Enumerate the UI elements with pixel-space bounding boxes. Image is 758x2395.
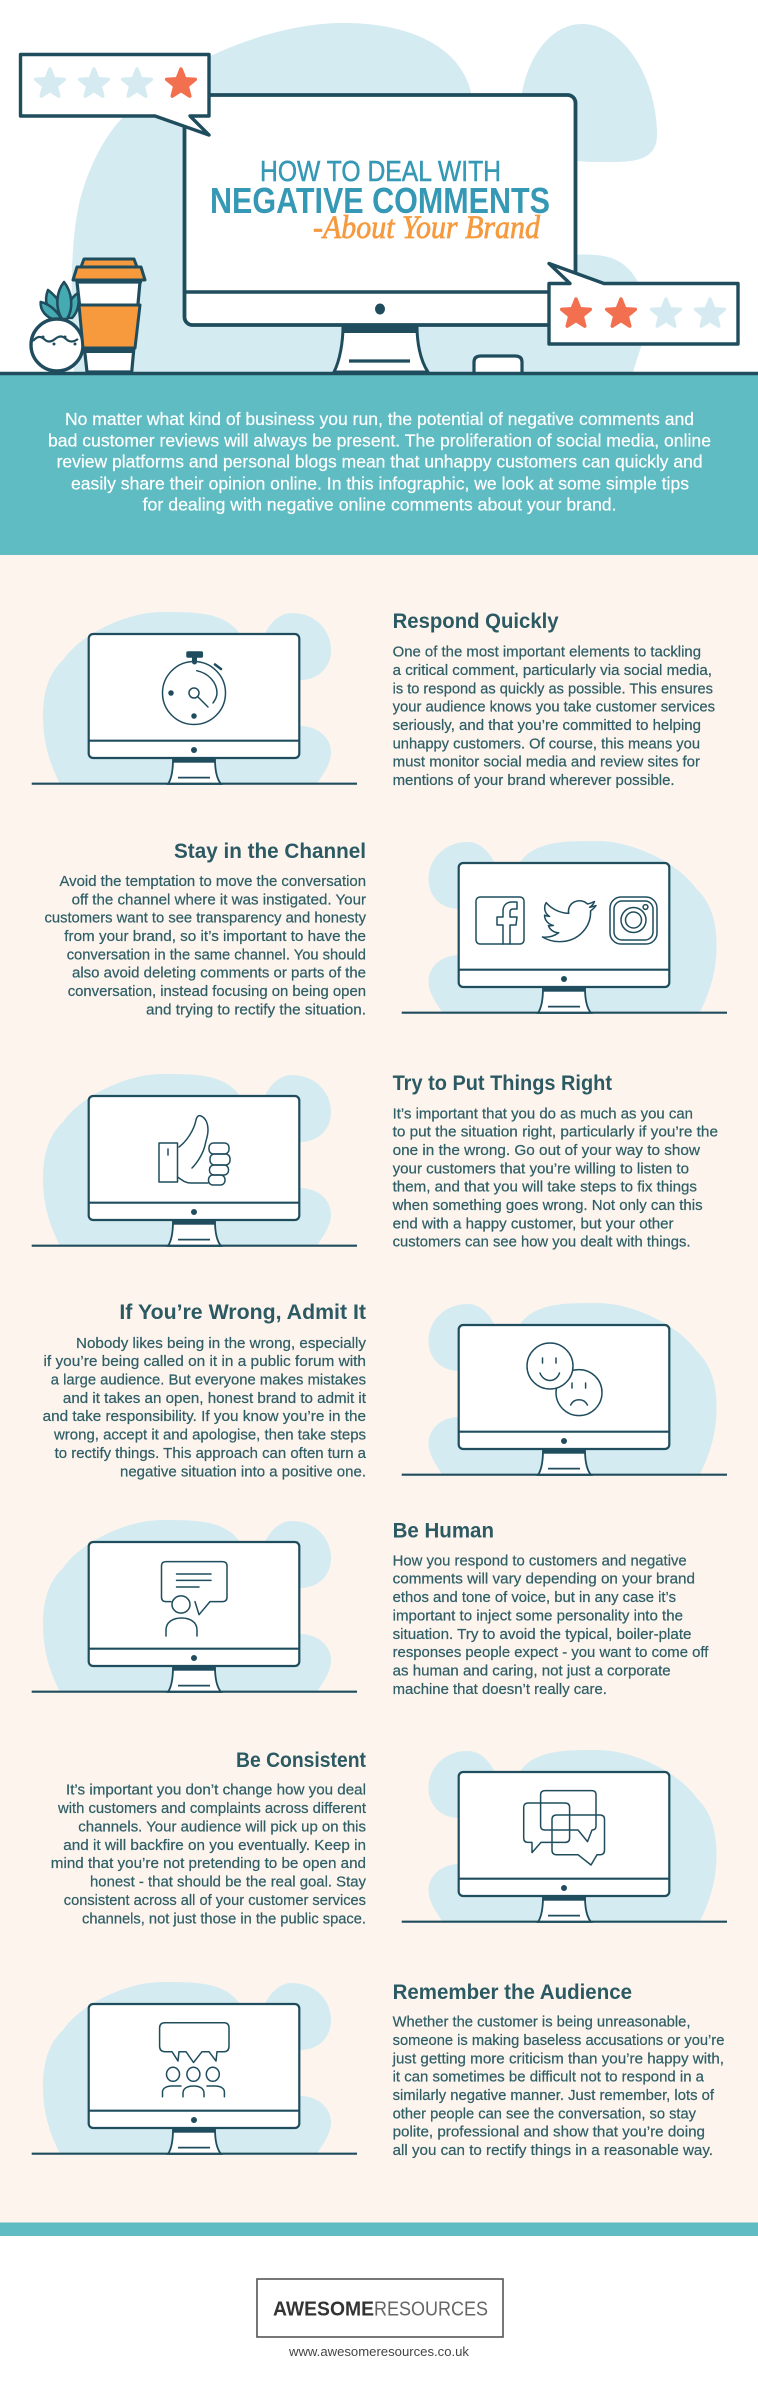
illustration: monitor with audience bbox=[32, 1982, 357, 2154]
illustration: monitor with faces bbox=[402, 1303, 727, 1475]
illustration: monitor with thumbs up bbox=[32, 1074, 357, 1246]
title bbox=[210, 156, 550, 246]
body text: if you’re being called on it in a public forum with bbox=[44, 1353, 366, 1370]
body text: a critical comment, particularly via social media, bbox=[393, 662, 712, 679]
body text: machine that doesn’t really care. bbox=[393, 1681, 607, 1698]
body text: mentions of your brand wherever possible. bbox=[393, 772, 675, 789]
cream content background bbox=[0, 555, 758, 2222]
body text: just getting more criticism than you’re happy with, bbox=[392, 2050, 724, 2067]
icon: facebook bbox=[476, 897, 524, 944]
body text: with customers and complaints across different bbox=[57, 1800, 367, 1817]
icon: stopwatch bbox=[162, 652, 226, 724]
review bubble: two stars bbox=[549, 264, 738, 344]
body text: wrong, accept it and apologise, then take steps bbox=[53, 1427, 366, 1444]
body text: How you respond to customers and negative bbox=[393, 1552, 687, 1569]
body text: one in the wrong. Go out of your way to show bbox=[393, 1142, 700, 1159]
body text bbox=[43, 1335, 367, 1480]
icon: person with speech bubble bbox=[162, 1562, 227, 1636]
logo: awesome resources: RESOURCES bbox=[374, 2299, 488, 2321]
body text: Avoid the temptation to move the conversation bbox=[60, 873, 366, 890]
title: NEGATIVE COMMENTS bbox=[210, 180, 550, 221]
panel: try to put things right bbox=[32, 1072, 718, 1251]
body text: and trying to rectify the situation. bbox=[146, 1001, 366, 1018]
body text: channels, not just those in the public space. bbox=[82, 1910, 366, 1927]
body text: your customers that you’re willing to listen to bbox=[393, 1160, 689, 1177]
body text: them, and that you will take steps to fix things bbox=[393, 1179, 697, 1196]
body text: other people can see the conversation, so stay bbox=[393, 2105, 696, 2122]
title: -About Your Brand bbox=[313, 210, 540, 246]
body text: consistent across all of your customer services bbox=[64, 1892, 366, 1909]
panel: stay in the channel bbox=[44, 840, 727, 1018]
mouse bbox=[474, 356, 522, 372]
illustration: monitor with person speaking bbox=[32, 1520, 357, 1692]
illustration: monitor with chat bubbles bbox=[402, 1750, 727, 1922]
body text: It’s important that you do as much as you can bbox=[393, 1105, 693, 1122]
body text: responses people expect - you want to come off bbox=[393, 1644, 709, 1661]
logo: awesome resources: AWESOME bbox=[273, 2299, 374, 2321]
illustration: monitor with stopwatch bbox=[32, 612, 357, 784]
body text: must monitor social media and review sites for bbox=[393, 754, 700, 771]
icon: twitter bbox=[542, 901, 596, 942]
body text: a large audience. But everyone makes mistakes bbox=[51, 1372, 366, 1388]
body text: situation. Try to avoid the typical, boiler-plate bbox=[393, 1626, 692, 1643]
body text: as human and caring, not just a corporate bbox=[393, 1662, 671, 1680]
body text bbox=[393, 644, 715, 789]
body text: also avoid deleting comments or parts of the bbox=[72, 965, 366, 982]
panel: remember the audience bbox=[32, 1981, 724, 2159]
heading: Be Consistent bbox=[236, 1749, 366, 1772]
title: HOW TO DEAL WITH bbox=[260, 156, 501, 188]
body text: important to inject some personality into the bbox=[393, 1607, 683, 1624]
body text: when something goes wrong. Not only can this bbox=[392, 1197, 703, 1214]
panel: if you're wrong, admit it bbox=[43, 1301, 727, 1480]
intro band: No matter what kind of business you run, the potential of negative comments and bbox=[65, 409, 694, 429]
body text: Whether the customer is being unreasonable, bbox=[393, 2014, 690, 2031]
body text: all you can to rectify things in a reasonable way. bbox=[393, 2142, 713, 2159]
body text: conversation, instead focusing on being open bbox=[68, 983, 366, 1000]
header illustration bbox=[20, 23, 738, 372]
icon: instagram bbox=[610, 897, 657, 944]
body text: your audience knows you take customer services bbox=[393, 699, 715, 716]
body text: and it takes an open, honest brand to admit it bbox=[63, 1390, 367, 1407]
body text: polite, professional and show that you’re doing bbox=[393, 2124, 705, 2141]
body text: Nobody likes being in the wrong, especially bbox=[76, 1335, 366, 1352]
body text: seriously, and that you’re committed to helping bbox=[393, 717, 701, 734]
body text bbox=[393, 1552, 709, 1698]
body text: is to respond as quickly as possible. This ensures bbox=[393, 680, 713, 697]
body text: channels. Your audience will pick up on this bbox=[78, 1818, 366, 1835]
body text: similarly negative manner. Just remember, lots of bbox=[393, 2087, 715, 2104]
body text: from your brand, so it’s important to have the bbox=[64, 928, 366, 945]
intro band: for dealing with negative online comments about your brand. bbox=[143, 495, 617, 515]
body text: comments will vary depending on your brand bbox=[393, 1571, 695, 1588]
body text: customers want to see transparency and honesty bbox=[44, 910, 366, 927]
body text: and it will backfire on you eventually. Keep in bbox=[63, 1837, 366, 1854]
body text: and take responsibility. If you know you’re in the bbox=[43, 1408, 366, 1425]
body text: It’s important you don’t change how you deal bbox=[66, 1782, 366, 1799]
logo: awesome resources bbox=[257, 2279, 503, 2337]
intro band bbox=[0, 374, 758, 555]
heading: Stay in the Channel bbox=[174, 840, 366, 863]
panel: respond quickly bbox=[32, 610, 715, 789]
body text: honest - that should be the real goal. Stay bbox=[90, 1874, 366, 1890]
icon: group with speech bubble bbox=[160, 2023, 229, 2097]
heading: Remember the Audience bbox=[393, 1981, 632, 2004]
icon: sad and happy faces bbox=[527, 1343, 602, 1416]
body text: One of the most important elements to tackling bbox=[393, 644, 701, 661]
intro band: review platforms and personal blogs mean that unhappy customers can quickly and bbox=[57, 452, 703, 472]
body text: ethos and tone of voice, but in any case it’s bbox=[393, 1589, 676, 1606]
body text bbox=[44, 873, 366, 1018]
body text: someone is making baseless accusations or you’re bbox=[393, 2032, 724, 2049]
body text: to rectify things. This approach can often turn a bbox=[55, 1445, 367, 1462]
coffee cup bbox=[73, 259, 145, 372]
heading: Respond Quickly bbox=[393, 610, 559, 633]
body text: mind that you’re not pretending to be open and bbox=[51, 1855, 366, 1872]
body text: end with a happy customer, but your other bbox=[393, 1215, 674, 1232]
heading: Be Human bbox=[393, 1520, 494, 1542]
illustration: monitor with social icons bbox=[402, 841, 727, 1013]
panel: be consistent bbox=[51, 1749, 727, 1927]
body text: unhappy customers. Of course, this means you bbox=[393, 735, 700, 752]
website url: www.awesomeresources.co.uk bbox=[288, 2344, 469, 2359]
body text bbox=[51, 1782, 367, 1927]
intro band: bad customer reviews will always be present. The proliferation of social media, online bbox=[48, 431, 711, 451]
body text: it can sometimes be difficult not to respond in a bbox=[393, 2069, 705, 2086]
plant pot bbox=[31, 282, 83, 371]
icon: thumbs up bbox=[159, 1116, 230, 1185]
body text: customers can see how you dealt with things. bbox=[393, 1234, 690, 1251]
body text bbox=[392, 2014, 724, 2159]
background blobs bbox=[72, 23, 657, 372]
body text: conversation in the same channel. You should bbox=[67, 946, 366, 963]
panel: be human bbox=[32, 1520, 709, 1698]
review bubble: one star bbox=[20, 54, 209, 135]
body text: off the channel where it was instigated. Your bbox=[72, 891, 366, 908]
body text: negative situation into a positive one. bbox=[120, 1463, 366, 1480]
monitor bbox=[184, 95, 576, 372]
heading: If You’re Wrong, Admit It bbox=[119, 1301, 366, 1324]
footer band bbox=[0, 2222, 758, 2236]
body text bbox=[392, 1105, 718, 1251]
intro band: easily share their opinion online. In this infographic, we look at some simple tips bbox=[71, 473, 689, 493]
icon: overlapping chat bubbles bbox=[524, 1791, 604, 1865]
heading: Try to Put Things Right bbox=[393, 1072, 612, 1095]
body text: to put the situation right, particularly if you’re the bbox=[393, 1124, 718, 1141]
